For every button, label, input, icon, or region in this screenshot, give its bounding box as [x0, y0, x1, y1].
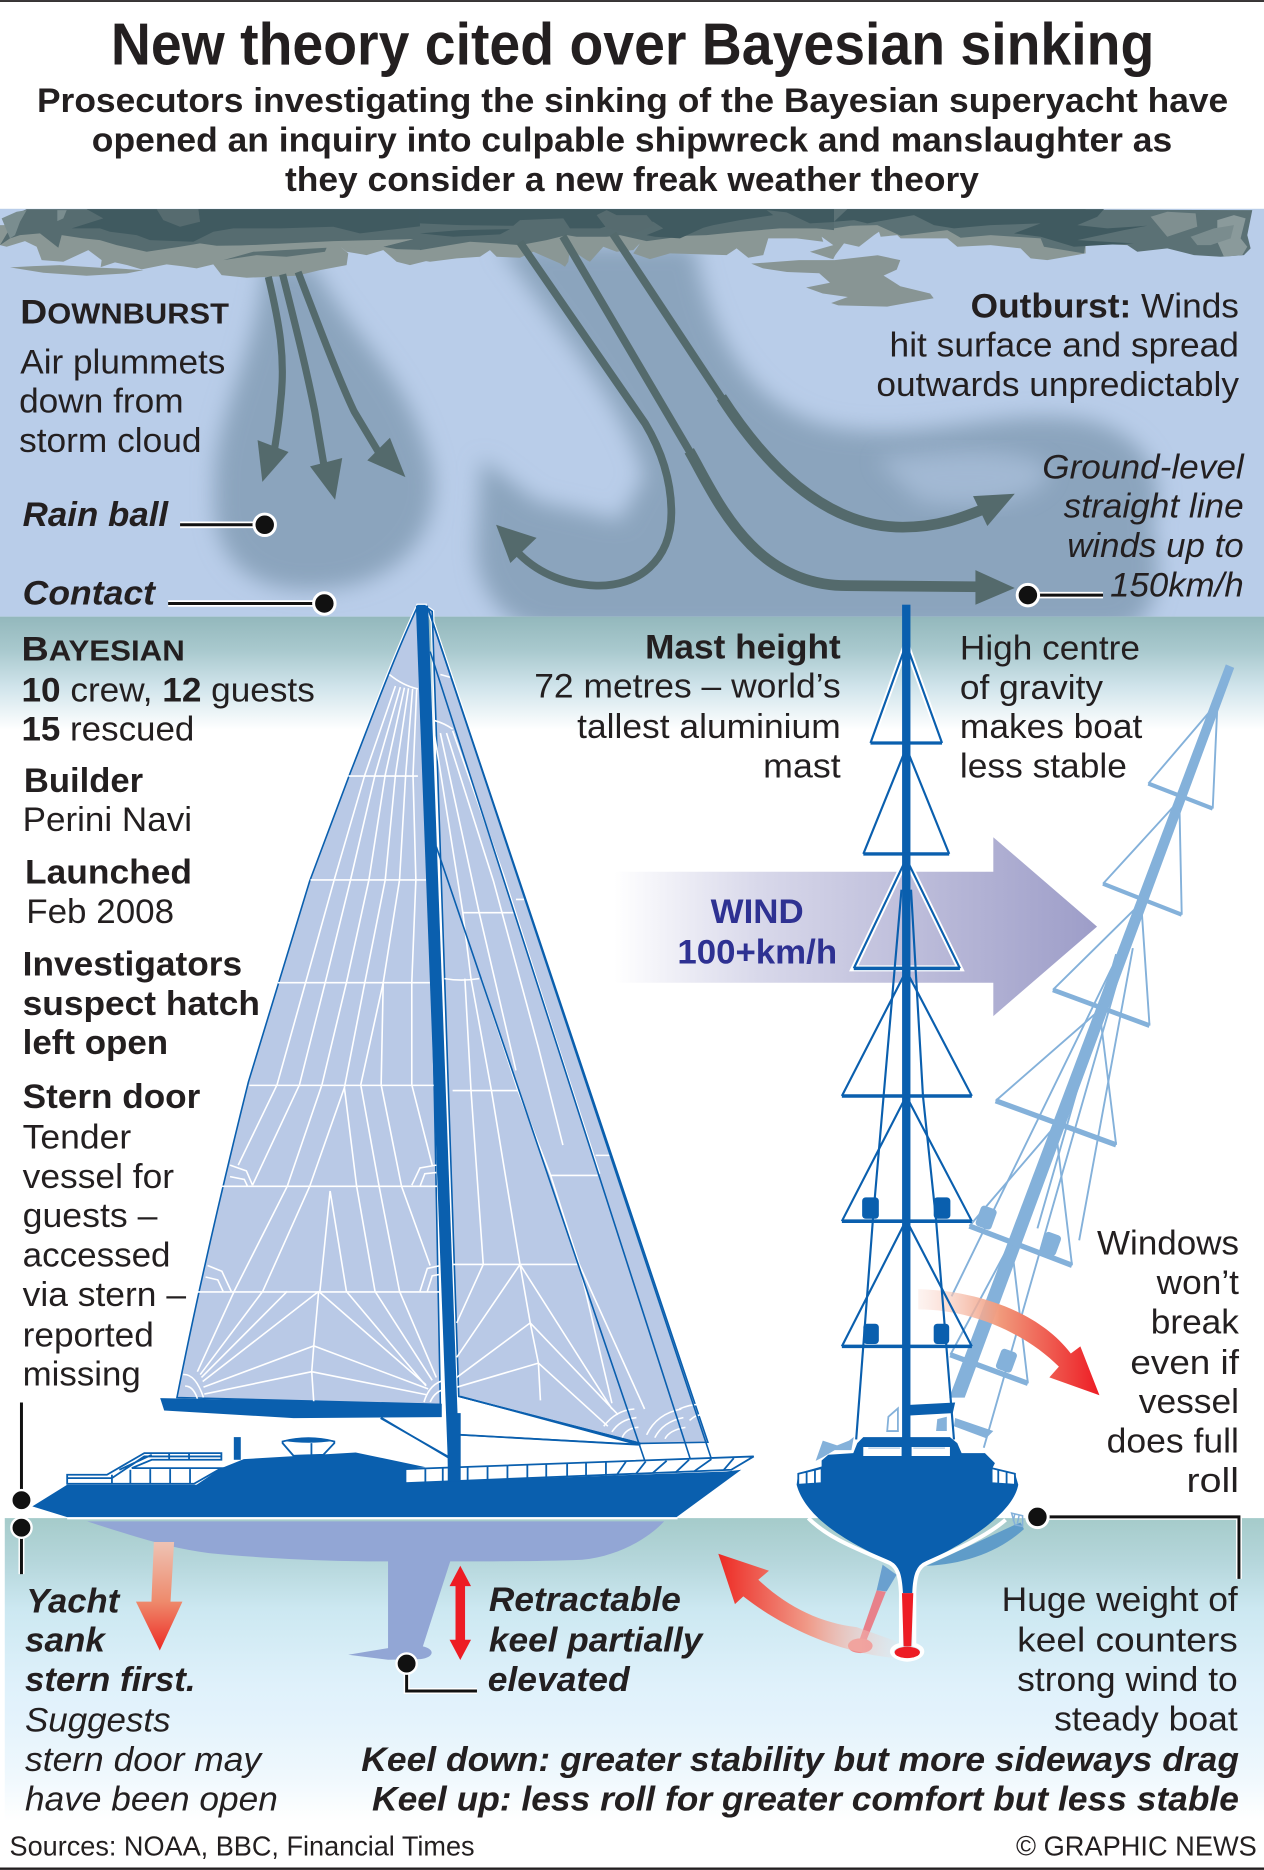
- mast height text: 72 metres – world’s: [534, 668, 841, 706]
- windows text: Windows: [1097, 1225, 1239, 1263]
- investigators: left open: [23, 1024, 168, 1062]
- yacht facts: [21, 631, 315, 1394]
- radar arch: [283, 1438, 334, 1456]
- main mast: [416, 606, 460, 1481]
- crew numbers: [21, 671, 315, 749]
- callout: ground-level winds: winds up to: [1067, 527, 1244, 565]
- mast height text: tallest aluminium: [577, 708, 841, 746]
- upright mast rear view: [842, 605, 972, 1445]
- panel: sky with downburst: [0, 209, 1264, 632]
- arrow: keel up and down: [450, 1566, 471, 1660]
- callout: huge keel weight: steady boat: [1054, 1700, 1238, 1738]
- arrows: downburst: [258, 272, 405, 500]
- deck railing: [405, 1456, 754, 1483]
- boom end: [910, 1402, 955, 1416]
- windows text: even if: [1130, 1344, 1239, 1382]
- stern door: Tender: [23, 1118, 131, 1156]
- yacht sank text: have been open: [25, 1780, 278, 1818]
- stern railing: [67, 1453, 221, 1484]
- boom: [160, 1398, 442, 1418]
- investigators: Investigators: [23, 946, 242, 984]
- callout: huge keel weight: [1002, 1506, 1239, 1738]
- mast: [902, 605, 910, 1445]
- callout: huge keel weight: strong wind to: [1017, 1661, 1238, 1699]
- yacht sank text: [25, 1582, 278, 1818]
- credit: © GRAPHIC NEWS: [1016, 1831, 1257, 1862]
- yacht sank text: sank: [25, 1622, 107, 1660]
- windows text: does full: [1107, 1423, 1239, 1461]
- arrow: stern sinking: [136, 1542, 182, 1650]
- wind label: 100+km/h: [677, 934, 837, 972]
- mast height text: Mast height: [645, 628, 841, 666]
- outburst text: Outburst: Winds: [971, 287, 1239, 325]
- launched: Launched: [25, 854, 192, 892]
- retractable keel text: elevated: [488, 1661, 631, 1699]
- centre of gravity text: less stable: [960, 748, 1127, 786]
- stern rails: [798, 1468, 822, 1485]
- outburst text: [876, 287, 1240, 404]
- windows text: vessel: [1139, 1383, 1239, 1421]
- title: New theory cited over Bayesian sinking: [111, 11, 1154, 78]
- subtitle: they consider a new freak weather theory: [285, 161, 980, 199]
- arrow: keel swing: [718, 1554, 897, 1658]
- arrow: roll to the right: [918, 1289, 1099, 1395]
- callout: rain ball: [23, 496, 275, 536]
- hull: [32, 1452, 741, 1517]
- heeled mast ghost: [816, 664, 1234, 1461]
- launched: [25, 854, 192, 931]
- stern view hull and keel: [718, 1437, 1024, 1660]
- masthead pods: [862, 1197, 950, 1344]
- stern door: Stern door: [23, 1078, 200, 1116]
- heading: Bayesian: BAYESIAN: [21, 631, 185, 669]
- top rule: [0, 0, 1264, 2]
- small cloud: [751, 255, 934, 307]
- stern door: missing: [23, 1356, 141, 1394]
- callout: contact: Contact: [23, 575, 157, 613]
- callout: huge keel weight: Huge weight of: [1002, 1581, 1238, 1619]
- rain ball shading: [214, 265, 434, 590]
- sky background: [0, 209, 1264, 617]
- windows text: roll: [1186, 1462, 1239, 1500]
- callout: rain ball: Rain ball: [23, 496, 170, 534]
- bottom rule: [0, 1867, 1264, 1870]
- mast height text: [534, 628, 841, 786]
- windows text: break: [1151, 1303, 1240, 1341]
- subtitle: [37, 82, 1228, 199]
- launched: Feb 2008: [26, 893, 174, 931]
- stern door: vessel for: [23, 1158, 174, 1196]
- builder: Perini Navi: [23, 801, 192, 839]
- mainsail: [177, 606, 451, 1404]
- subtitle: Prosecutors investigating the sinking of the Bayesian superyacht have: [37, 82, 1228, 120]
- crew numbers: 10 crew, 12 guests: [21, 671, 315, 709]
- storm cloud: [0, 209, 1252, 278]
- outburst text: hit surface and spread: [890, 327, 1239, 365]
- yacht sank text: stern first.: [25, 1661, 196, 1699]
- keel: [902, 1593, 913, 1646]
- outburst text: outwards unpredictably: [876, 366, 1240, 404]
- callout: contact: [23, 575, 335, 614]
- retractable keel text: [488, 1581, 704, 1699]
- subtitle: opened an inquiry into culpable shipwreck and manslaughter as: [92, 122, 1172, 160]
- downburst label: DOWNBURST: [20, 293, 230, 331]
- centre of gravity text: [960, 630, 1143, 786]
- hull and superstructure: [32, 1396, 754, 1518]
- stern door: via stern –: [23, 1276, 187, 1314]
- spreaders and shrouds: [842, 644, 972, 1439]
- keel comparison text: Keel up: less roll for greater comfort but less stable: [372, 1780, 1239, 1818]
- stern door: reported: [23, 1316, 154, 1354]
- centre of gravity text: makes boat: [960, 708, 1143, 746]
- callout: stern markers: [11, 1402, 32, 1574]
- white halo around upper rigging: [854, 644, 960, 968]
- downburst label: Air plummets: [20, 343, 225, 381]
- yacht sank text: Yacht: [26, 1582, 121, 1620]
- panel: water under yacht: [5, 1518, 1264, 1821]
- stern door: accessed: [23, 1237, 171, 1275]
- hull: [797, 1437, 1018, 1593]
- underwater hull and keel: [87, 1521, 664, 1660]
- foresails: [381, 609, 715, 1472]
- sails: [177, 606, 715, 1481]
- arrow: wind: [614, 837, 1097, 1016]
- callout: ground-level winds: 150km/h: [1110, 566, 1244, 604]
- yacht sank text: stern door may: [25, 1741, 264, 1779]
- retractable keel text: Retractable: [489, 1581, 681, 1619]
- yacht side view: [32, 606, 754, 1660]
- downburst label: down from: [19, 383, 184, 421]
- stern door: guests –: [23, 1197, 158, 1235]
- crew numbers: 15 rescued: [21, 711, 194, 749]
- yacht sank text: Suggests: [25, 1702, 171, 1740]
- sources: Sources: NOAA, BBC, Financial Times: [10, 1831, 475, 1862]
- funnel: [234, 1437, 241, 1460]
- callout: huge keel weight: keel counters: [1017, 1622, 1238, 1660]
- investigators: suspect hatch: [23, 985, 260, 1023]
- callout: ground-level winds: Ground-level: [1042, 448, 1245, 486]
- wind label: WIND: [711, 893, 804, 931]
- panel: sea surface band: [0, 617, 1264, 730]
- mast height text: mast: [763, 748, 841, 786]
- stern door: [23, 1078, 200, 1394]
- retractable keel text: keel partially: [489, 1622, 704, 1660]
- keel ghost: [848, 1513, 1024, 1653]
- downburst label: [19, 293, 230, 460]
- centre of gravity text: of gravity: [960, 669, 1104, 707]
- builder: Builder: [24, 762, 143, 800]
- downburst label: storm cloud: [19, 422, 202, 460]
- outburst light pocket: [876, 451, 1049, 505]
- builder: [23, 762, 192, 839]
- outburst shading: [476, 245, 1158, 632]
- callout: keel marker: [396, 1653, 477, 1691]
- windows text: won’t: [1156, 1264, 1239, 1302]
- wind label: [677, 893, 837, 972]
- callout: ground-level winds: straight line: [1064, 488, 1244, 526]
- callout: ground-level winds: [1017, 448, 1245, 606]
- investigators: [23, 946, 260, 1062]
- windows text: [1097, 1225, 1240, 1500]
- stern windows: [863, 1447, 950, 1456]
- keel comparison text: [361, 1741, 1239, 1818]
- arrows: outburst: [496, 234, 1015, 605]
- centre of gravity text: High centre: [960, 630, 1140, 668]
- keel comparison text: Keel down: greater stability but more sideways drag: [361, 1741, 1239, 1779]
